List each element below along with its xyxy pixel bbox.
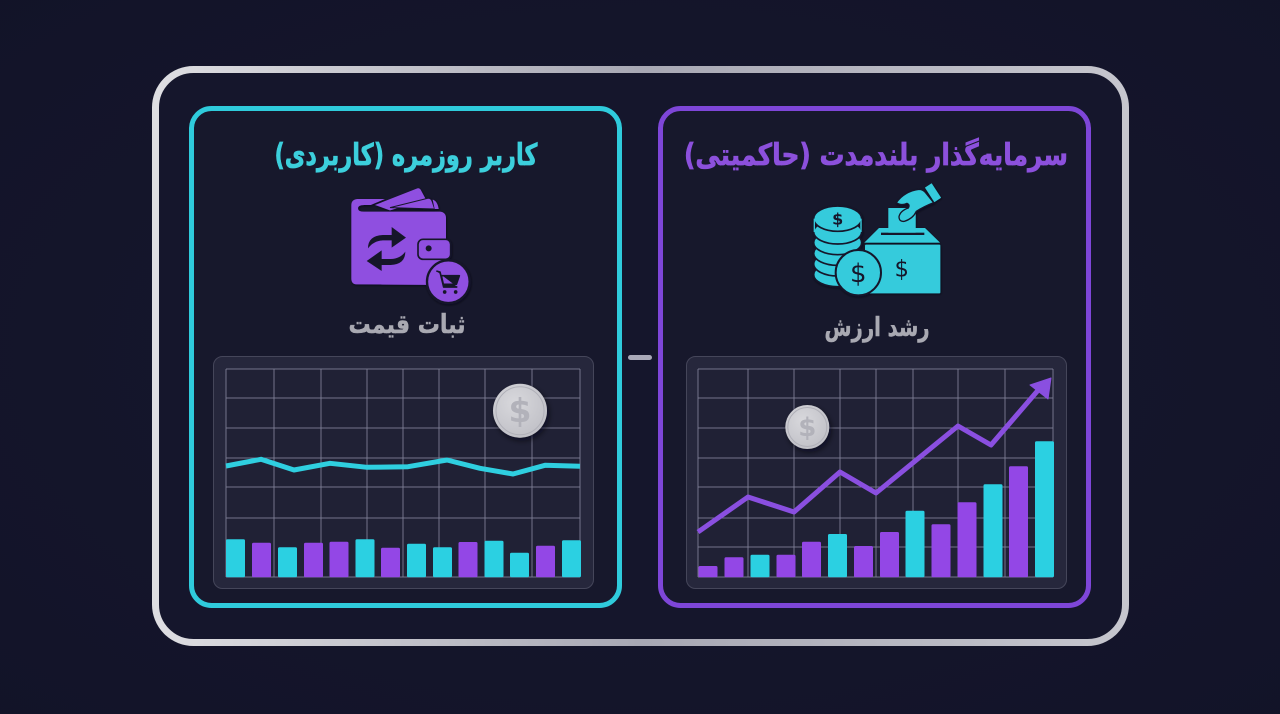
icon: wallet with cart — [351, 188, 470, 303]
heading: daily user: کاربر روزمره (کاربردی) — [274, 138, 538, 173]
icon: coins and ballot box: $ — [832, 210, 843, 229]
icon: coins and ballot box — [814, 183, 941, 295]
icon: silver coin — [785, 405, 829, 449]
line chart: rising arrow — [698, 378, 1051, 532]
line chart: flat price line — [226, 459, 580, 474]
icon: coins and ballot box: $ — [894, 257, 909, 283]
icon: coins and ballot box: $ — [850, 259, 867, 289]
bar chart: stable bars — [226, 539, 581, 577]
connector dash — [628, 355, 652, 360]
icon: silver coin — [493, 384, 547, 438]
heading: long-term investor: سرمایه‌گذار بلندمدت (حاکمیتی) — [684, 137, 1068, 173]
icon: silver coin: $ — [798, 413, 816, 443]
outer silver frame — [156, 70, 1126, 642]
panel: long-term investor — [660, 108, 1088, 606]
subheading: price stability: ثبات قیمت — [348, 310, 466, 340]
subheading: value growth: رشد ارزش — [824, 313, 930, 343]
bar chart: rising bars — [698, 441, 1054, 577]
panel: daily user — [192, 108, 620, 606]
chart card: stable price — [214, 356, 594, 588]
chart card: growth — [686, 356, 1066, 588]
icon: silver coin: $ — [509, 391, 531, 430]
